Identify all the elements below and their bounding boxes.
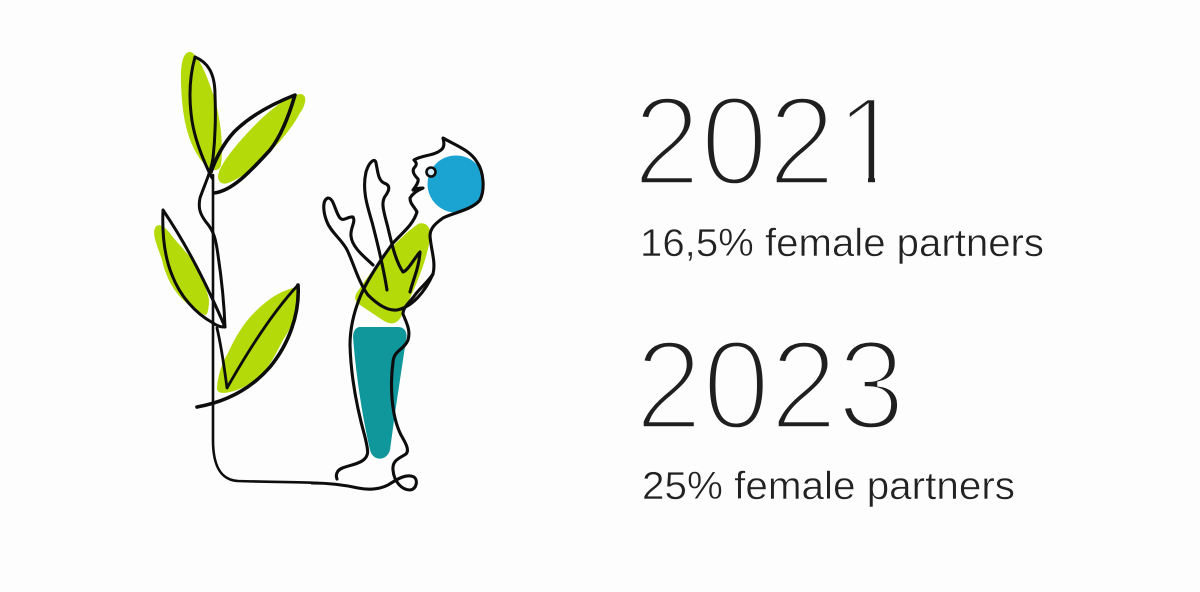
leaf colour fills — [154, 52, 305, 393]
text: 16,5% female partners: 16,5% female partners — [640, 222, 1044, 265]
text: 25% female partners: 25% female partners — [642, 465, 1015, 508]
figure outline — [312, 138, 483, 490]
illustration: plant — [154, 52, 318, 483]
torso: green shape — [355, 223, 430, 323]
legs: teal shape — [353, 327, 407, 459]
illustration: person — [312, 138, 484, 490]
head: blue circle — [428, 156, 484, 212]
heading: 2021: 2021 — [633, 70, 903, 212]
eye — [426, 168, 436, 176]
leaf and stem outlines — [163, 57, 318, 483]
heading: 2023: 2023 — [635, 314, 905, 456]
